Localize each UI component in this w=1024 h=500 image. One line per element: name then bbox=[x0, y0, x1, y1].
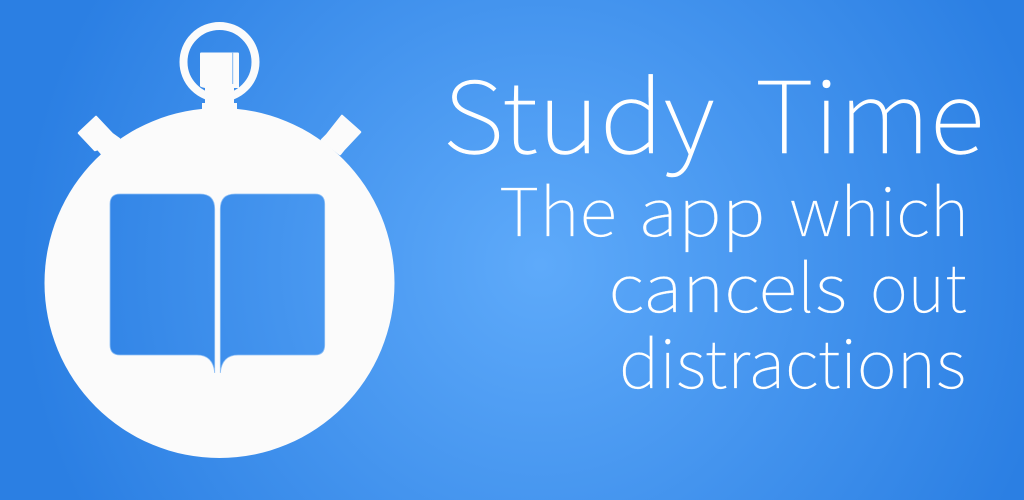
right button bbox=[322, 116, 360, 154]
tagline line 1: app bbox=[638, 160, 766, 256]
stopwatch crown bbox=[200, 52, 239, 112]
tagline line 1 bbox=[499, 160, 969, 256]
title bbox=[442, 38, 984, 182]
tagline bbox=[499, 160, 969, 408]
title: Study bbox=[442, 38, 714, 182]
tagline line 2 bbox=[608, 236, 966, 332]
title: Time bbox=[755, 38, 984, 182]
left button bbox=[79, 117, 119, 156]
tagline line 2: out bbox=[870, 236, 966, 332]
stopwatch body bbox=[44, 108, 394, 458]
stopwatch crown ring bbox=[184, 26, 256, 98]
right book page bbox=[220, 194, 325, 373]
tagline line 3: distractions bbox=[619, 312, 966, 408]
tagline line 2: cancels bbox=[608, 236, 847, 332]
tagline line 1: which bbox=[790, 160, 969, 256]
icon: stopwatch with open book bbox=[44, 26, 394, 458]
crown highlight line bbox=[232, 52, 233, 84]
tagline line 1: The bbox=[499, 160, 617, 256]
left book page bbox=[110, 194, 215, 373]
